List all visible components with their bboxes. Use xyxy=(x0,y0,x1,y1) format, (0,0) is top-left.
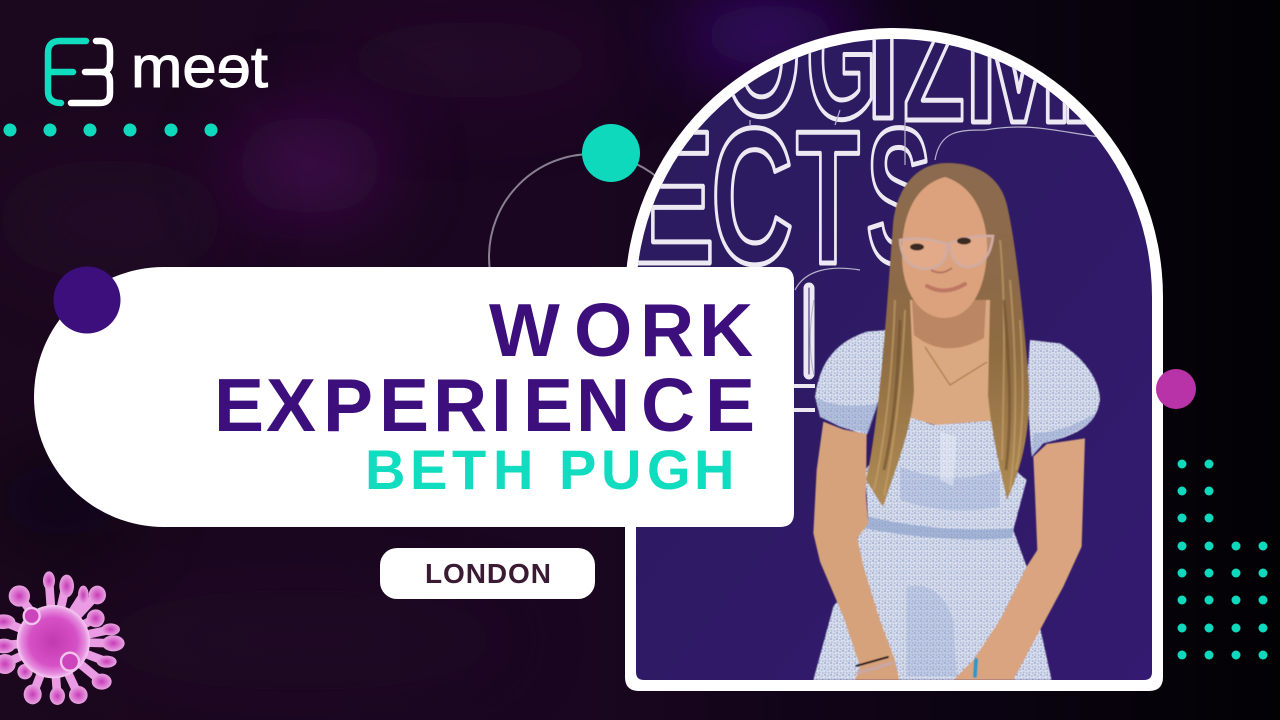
neon sign: T xyxy=(796,92,860,304)
neon sign: S xyxy=(866,88,932,305)
logo wordmark: meɘt xyxy=(131,35,268,100)
icon: pink virus xyxy=(0,571,125,705)
logo: meet xyxy=(48,35,268,103)
arch frame xyxy=(625,28,1163,691)
neon wires xyxy=(750,110,1100,375)
purple circle xyxy=(54,266,120,334)
heading: experience: EXPERIENCE xyxy=(214,363,755,447)
dots grid: right xyxy=(1178,460,1268,660)
heading: work: WORK xyxy=(489,288,753,372)
face xyxy=(902,177,987,318)
arms xyxy=(813,422,1085,680)
logo icon: teal bracket xyxy=(48,41,86,103)
dress xyxy=(813,330,1100,680)
logo icon: white bracket xyxy=(71,41,110,103)
teal circle xyxy=(582,124,640,182)
eyes xyxy=(910,238,971,250)
necklace xyxy=(925,347,987,385)
location pill xyxy=(380,548,595,599)
photo: wall with neon sign and person xyxy=(624,0,1152,680)
nose and mouth xyxy=(927,268,965,291)
subheading: name: BETH PUGH xyxy=(365,438,734,501)
bracelets xyxy=(856,657,976,676)
neon sign xyxy=(624,0,1120,410)
dots row: top left xyxy=(4,124,218,136)
chest and neck xyxy=(909,299,992,426)
thin ring behind arch xyxy=(489,154,695,360)
location label: LONDON xyxy=(425,558,551,589)
magenta circle xyxy=(1156,369,1196,409)
photo arch xyxy=(624,0,1163,691)
person xyxy=(813,163,1100,680)
glasses xyxy=(900,236,993,269)
hair strands xyxy=(874,240,1023,495)
sleeves xyxy=(815,330,887,435)
neck shadow xyxy=(912,300,986,348)
title card xyxy=(34,267,794,527)
neon sign: E xyxy=(624,92,715,304)
hair xyxy=(866,163,1029,507)
neon sign: C xyxy=(711,87,793,304)
